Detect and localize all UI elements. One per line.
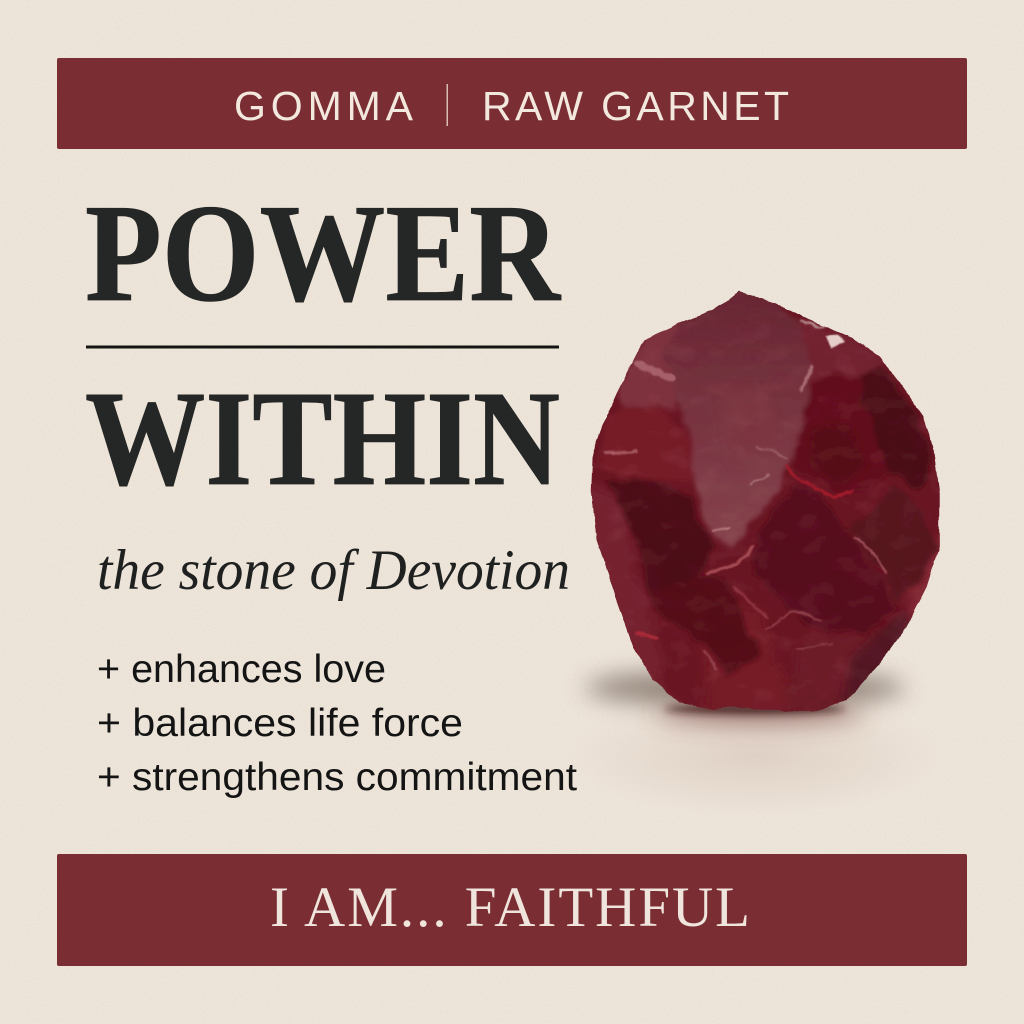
central pale facet [660,288,812,548]
benefit: balances life force: + balances life force [97,702,463,745]
upper left red facet [600,403,693,480]
white crystal chip [825,335,845,348]
illustration: raw garnet stone [590,290,940,712]
right dark facet [793,368,890,497]
far right dark facet [857,367,930,490]
benefit: enhances love: + enhances love [97,648,386,691]
top banner [57,58,967,149]
title divider rule [86,346,559,348]
bottom banner [57,854,967,966]
crisp facets [600,288,933,677]
banner text: GOMMA: GOMMA [234,83,414,129]
title: WITHIN: WITHIN [85,364,560,514]
upper left dull rim [617,320,683,412]
subtitle: the stone of Devotion [97,539,570,602]
top right rim [790,317,887,387]
banner divider [446,84,448,126]
stone ground shadow [565,669,945,817]
surface mottling [591,348,936,692]
facet shading [807,416,912,702]
banner text: RAW GARNET: RAW GARNET [482,83,789,129]
lower left dark facet [650,577,758,677]
benefit: strengthens commitment: + strengthens commitment [97,756,577,799]
banner text: I AM... FAITHFUL: I AM... FAITHFUL [270,876,750,939]
right lower facet [847,487,933,600]
title: POWER: POWER [85,176,562,331]
lower centre dark facet [753,483,897,633]
ridge highlights [605,322,887,670]
left dark facet [607,480,715,593]
soft tonal areas [580,480,950,713]
benefits list [97,648,577,799]
